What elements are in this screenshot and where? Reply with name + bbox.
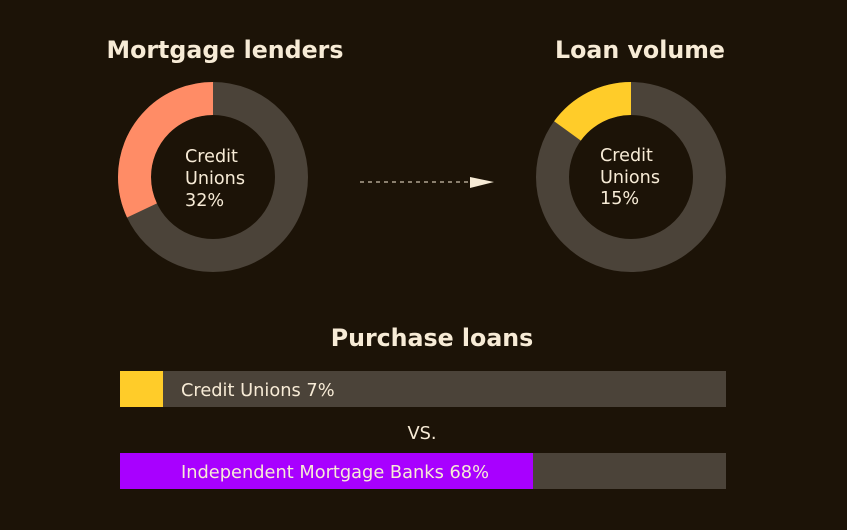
donut: mortgage lenders: Credit [185,147,238,167]
vs label: VS. [407,423,437,444]
donut: loan volume: Credit [600,146,653,166]
donut: loan volume [552,98,710,256]
arrow [360,177,494,188]
donut: loan volume: Unions [600,168,660,188]
donut: mortgage lenders [134,98,292,256]
donut: loan volume: 15% [600,189,639,209]
donut: mortgage lenders: Unions [185,169,245,189]
donut: mortgage lenders: 32% [185,191,224,211]
title: Purchase loans: Purchase loans [331,324,533,352]
bar: credit unions [120,371,726,407]
title: Mortgage lenders: Mortgage lenders [107,36,343,64]
bar: independent mortgage banks: Independent Mortgage Banks 68% [181,462,489,483]
bar: independent mortgage banks [120,453,726,489]
bar: credit unions: Credit Unions 7% [181,380,335,401]
title: Loan volume: Loan volume [555,36,725,64]
